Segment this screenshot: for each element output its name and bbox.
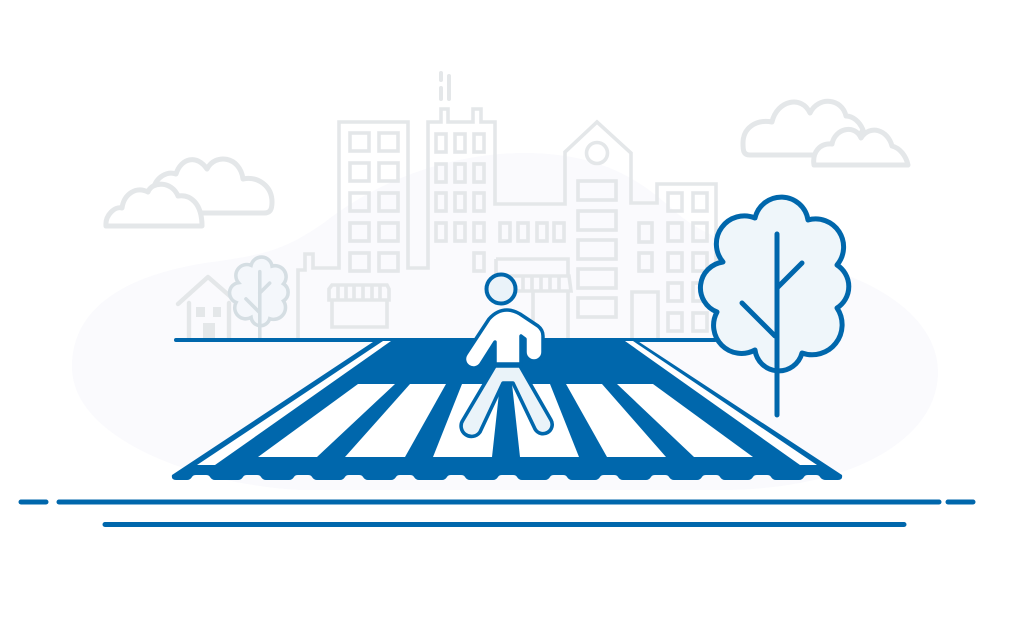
small tree <box>230 257 288 339</box>
windows building 2 <box>436 134 564 271</box>
skyline outline <box>298 109 716 338</box>
zebra stripes <box>258 384 395 457</box>
crosswalk road <box>172 338 842 480</box>
pedestrian <box>461 274 552 436</box>
road surface <box>172 338 842 480</box>
torso and arms <box>464 310 543 368</box>
background blob <box>72 153 938 490</box>
house <box>178 277 239 338</box>
tall building windows and clock <box>578 142 616 317</box>
shop centre <box>496 259 571 338</box>
horizon line <box>176 338 715 342</box>
clouds right <box>743 101 908 165</box>
legs <box>461 366 552 436</box>
head <box>486 274 516 304</box>
ground lines <box>21 502 973 524</box>
edge lines <box>197 341 391 465</box>
right building windows <box>632 193 707 338</box>
city buildings <box>298 73 716 338</box>
smoke <box>441 73 449 99</box>
windows building 1 <box>350 133 398 271</box>
shop left <box>329 285 389 327</box>
clouds left <box>106 159 272 226</box>
large tree <box>700 197 849 415</box>
